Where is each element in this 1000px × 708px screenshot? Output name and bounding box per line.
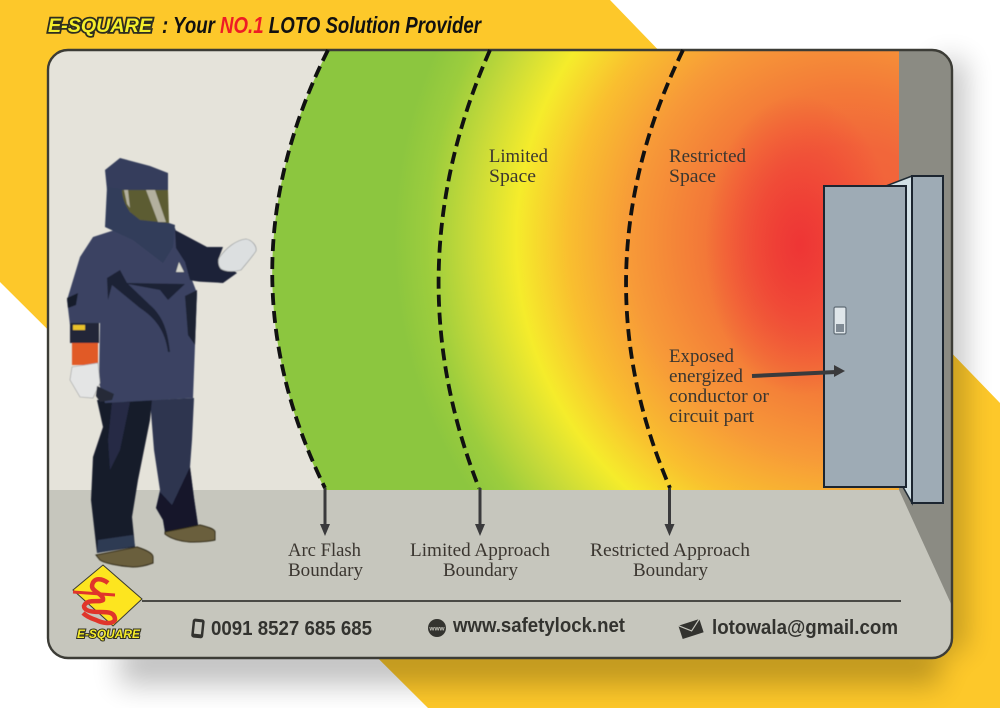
arrow: limited approach boundary	[475, 488, 485, 536]
logo diamond	[73, 565, 142, 626]
zone label: limited space	[489, 146, 548, 187]
yellow tag	[73, 325, 85, 330]
raised glove	[218, 239, 256, 271]
contact: phone	[191, 618, 372, 640]
phone number: 0091 8527 685 685	[211, 618, 372, 640]
arrow: restricted approach boundary	[664, 488, 674, 536]
wrist band	[70, 323, 99, 343]
tagline: : Your NO.1 LOTO Solution Provider	[162, 12, 482, 38]
logo serpent mark	[83, 579, 115, 623]
zone label: restricted space	[669, 146, 746, 187]
logo wordmark: E-SQUARE	[77, 627, 141, 641]
label: limited approach boundary: Boundary	[443, 560, 518, 581]
heading	[48, 12, 482, 38]
company logo	[73, 565, 142, 641]
door switch	[834, 307, 846, 334]
label: arc flash boundary	[288, 540, 363, 581]
label: limited approach boundary	[410, 540, 550, 581]
face shield	[122, 190, 169, 223]
label: restricted approach boundary	[590, 540, 751, 581]
electrical panel	[824, 176, 943, 503]
contact: website	[428, 615, 625, 637]
contact: email	[678, 617, 898, 639]
callout: exposed conductor: Exposed	[669, 346, 734, 367]
label: arc flash boundary: Arc Flash	[288, 540, 361, 561]
icon: envelope	[678, 619, 704, 639]
restricted approach boundary line	[626, 50, 683, 488]
lower glove	[70, 363, 100, 398]
callout: exposed conductor	[669, 346, 770, 427]
panel border	[48, 50, 952, 658]
brand wordmark: E-SQUARE	[48, 16, 153, 37]
zone label: restricted space: Restricted	[669, 146, 746, 167]
heat gradient zones	[260, 50, 900, 491]
connecting side	[886, 176, 912, 503]
card drop shadow	[120, 60, 965, 685]
label: restricted approach boundary: Restricted Approach	[590, 540, 751, 561]
figure: worker in arc flash suit	[67, 158, 256, 567]
icon: globe: www	[428, 626, 446, 632]
arrow: arc flash boundary	[320, 488, 330, 536]
website address: www.safetylock.net	[452, 615, 625, 637]
label: restricted approach boundary: Boundary	[633, 560, 708, 581]
callout: exposed conductor: circuit part	[669, 406, 755, 427]
limited approach boundary line	[439, 50, 490, 488]
zone label: restricted space: Space	[669, 166, 716, 187]
arrow to energized part	[752, 365, 845, 377]
side wall	[899, 50, 952, 606]
footer divider	[142, 600, 901, 602]
floor	[48, 490, 952, 660]
boots	[96, 525, 215, 567]
zone label: limited space: Space	[489, 166, 536, 187]
logo bar	[73, 592, 115, 595]
panel box	[912, 176, 943, 503]
trousers	[91, 398, 198, 553]
callout: exposed conductor: energized	[669, 366, 743, 387]
back wall	[49, 51, 326, 490]
tool in hand	[96, 386, 114, 402]
email address: lotowala@gmail.com	[712, 617, 898, 639]
label: arc flash boundary: Boundary	[288, 560, 363, 581]
icon: globe	[428, 619, 446, 637]
label: limited approach boundary: Limited Approach	[410, 540, 550, 561]
orange glove cuff	[72, 343, 98, 365]
chest badge	[176, 262, 184, 272]
arc flash boundary line	[272, 50, 328, 488]
hood	[105, 158, 175, 263]
callout: exposed conductor: conductor or	[669, 386, 770, 407]
main panel	[48, 50, 952, 660]
zone label: limited space: Limited	[489, 146, 548, 167]
icon: phone	[191, 618, 205, 639]
jacket	[67, 225, 237, 403]
panel door	[824, 186, 906, 487]
